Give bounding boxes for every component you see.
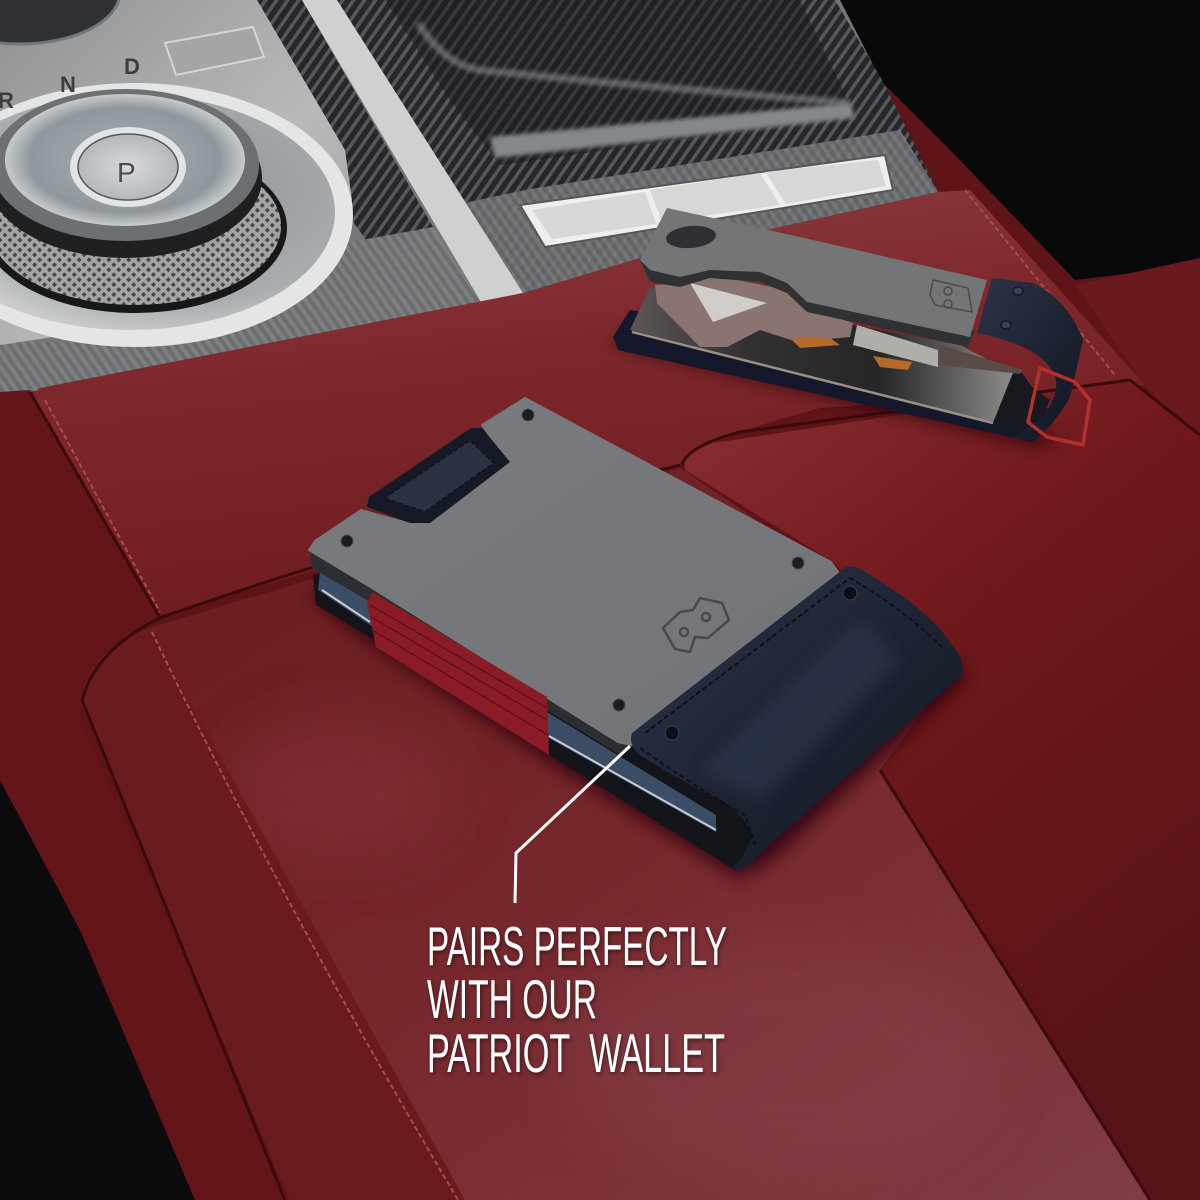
plate edge: [309, 547, 632, 755]
red elastic band: [367, 592, 549, 755]
cushion highlight: [560, 940, 1000, 1180]
hexagon logo: [663, 598, 729, 652]
grey metal plate: [309, 398, 838, 745]
console buttons: [520, 155, 893, 247]
plate screws: [341, 409, 804, 711]
chrome strip: [302, 0, 523, 302]
plate logo: [930, 280, 972, 312]
park button: [70, 127, 186, 207]
carbon panel left of strip: [257, 0, 433, 245]
callout text: PATRIOT WALLET: [427, 1022, 725, 1084]
carbon reflections: [418, 23, 850, 103]
callout text: [427, 915, 727, 1084]
light herringbone panel: [0, 227, 481, 392]
gear ring: [0, 83, 353, 347]
flap sheen: [700, 620, 900, 800]
black lining: [313, 570, 757, 870]
leather pull tab: [367, 428, 510, 523]
gear letters: P: [117, 157, 136, 188]
callout text: WITH OUR: [427, 968, 597, 1030]
right leather: [1075, 258, 1200, 450]
car console: [0, 0, 938, 392]
callout line: [515, 746, 630, 903]
wallet shadow: [313, 585, 965, 878]
upper leather panel: [30, 190, 1145, 615]
dark top right corner: [820, 0, 1200, 280]
card stack: [318, 572, 716, 832]
top dial: [0, 0, 120, 44]
black floor: [0, 780, 195, 1200]
Patriot wallet: [309, 398, 963, 870]
side panel: [82, 630, 465, 1200]
plate screw: [665, 224, 717, 250]
gear knob: [0, 98, 262, 258]
navy leather flap: [631, 567, 963, 869]
small silver switch: [165, 27, 264, 75]
key organiser shadow: [612, 330, 1060, 445]
dark right gap: [993, 373, 1050, 435]
front cushion: [80, 468, 1150, 1200]
left bolster: [0, 390, 290, 1200]
plate underside: [640, 260, 975, 347]
knurled dial: [0, 143, 287, 313]
navy leather strap: [977, 278, 1083, 440]
carbon fibre trim right of strip: [335, 0, 938, 293]
console base: [0, 0, 938, 392]
gear letters: D: [124, 54, 140, 79]
callout text: PAIRS PERFECTLY: [427, 915, 727, 977]
silver panel: [0, 0, 352, 345]
gear letters: N: [60, 72, 76, 97]
leather seams: [45, 190, 1115, 1200]
red carabiner: [1028, 368, 1090, 445]
navy base: [613, 310, 1055, 442]
gear letters: [0, 54, 140, 188]
grey top plate: [640, 208, 987, 337]
inner metal plate: [630, 287, 1013, 423]
lower grey weave: [455, 130, 938, 293]
stepped keys: [655, 273, 853, 347]
leather rivets: [665, 586, 857, 740]
key organiser: [613, 208, 1090, 445]
